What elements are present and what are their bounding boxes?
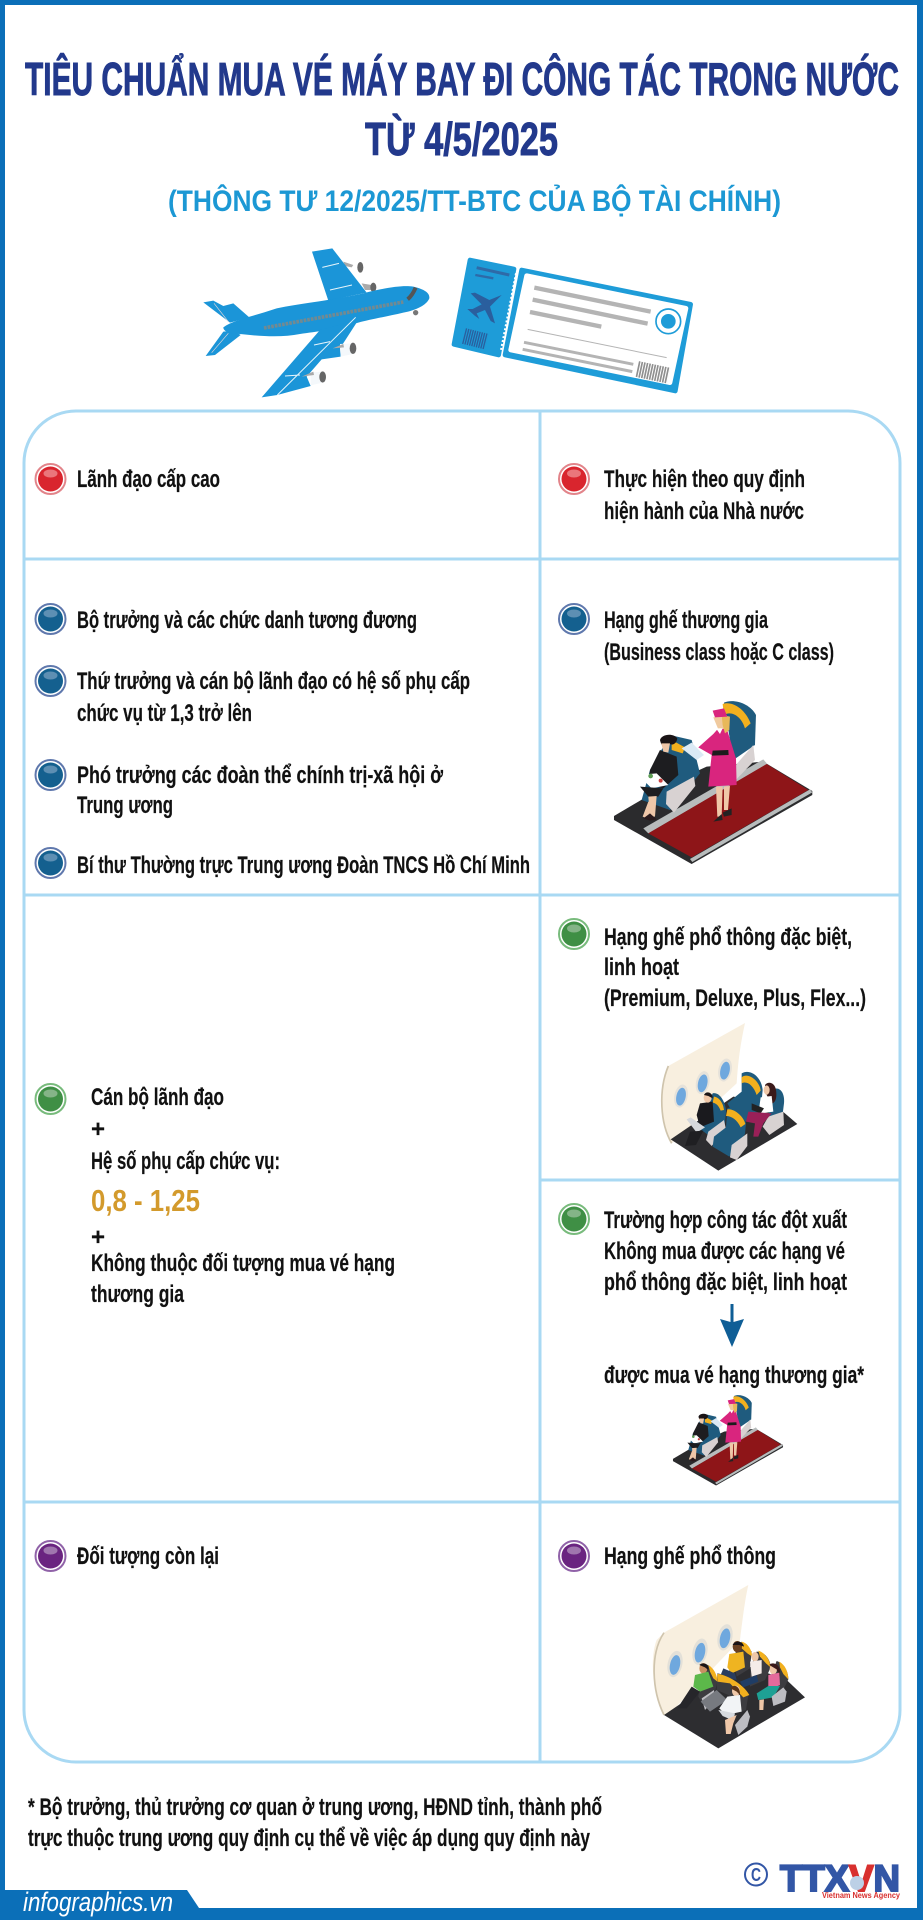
bullet: minister xyxy=(36,604,66,634)
text: youth union secretary: Bí thư Thường trực Trung ương Đoàn TNCS Hồ Chí Minh xyxy=(77,852,530,879)
bullet: red left xyxy=(36,464,66,494)
footnote xyxy=(28,1794,602,1852)
panel: comparison table xyxy=(24,411,900,1762)
bullet: business class xyxy=(559,604,589,634)
text: current state regulations: Thực hiện theo quy định xyxy=(604,466,805,493)
text: urgent travel xyxy=(604,1207,847,1296)
footnote: trực thuộc trung ương quy định cụ thể về việc áp dụng quy định này xyxy=(28,1825,590,1852)
arrow: down xyxy=(720,1304,744,1347)
title xyxy=(25,53,899,165)
row 4: remaining staff xyxy=(36,1541,805,1748)
text: business class xyxy=(604,607,834,666)
subtitle: (THÔNG TƯ 12/2025/TT-BTC CỦA BỘ TÀI CHÍNH) xyxy=(168,184,781,218)
footnote: * Bộ trưởng, thủ trưởng cơ quan ở trung ương, HĐND tỉnh, thành phố xyxy=(28,1794,602,1821)
text: premium economy xyxy=(604,924,866,1012)
text: current state regulations xyxy=(604,466,805,525)
bullet: red right xyxy=(559,464,589,494)
text: mid-level criteria: + xyxy=(91,1224,105,1251)
row 1: senior leaders xyxy=(36,464,805,525)
bullet: deputy minister xyxy=(36,666,66,696)
icon: airplane xyxy=(203,248,429,397)
text: mid-level criteria: Không thuộc đối tượng mua vé hạng xyxy=(91,1250,395,1277)
bullet: deputy heads xyxy=(36,760,66,790)
text: deputy heads: Phó trưởng các đoàn thể chính trị-xã hội ở xyxy=(77,762,444,789)
bullet: purple right xyxy=(559,1541,589,1571)
text: mid-level criteria xyxy=(91,1084,395,1308)
text: mid-level criteria: 0,8 - 1,25 xyxy=(91,1183,200,1218)
text: current state regulations: hiện hành của Nhà nước xyxy=(604,498,804,525)
illustration: small business cabin xyxy=(673,1395,783,1486)
bullet: green right top xyxy=(559,919,589,949)
text: deputy minister: Thứ trưởng và cán bộ lãnh đạo có hệ số phụ cấp xyxy=(77,668,470,695)
text: deputy minister: chức vụ từ 1,3 trở lên xyxy=(77,700,252,727)
bullet: youth union secretary xyxy=(36,848,66,878)
text: senior leaders: Lãnh đạo cấp cao xyxy=(77,466,220,493)
logo: TTXVN: C xyxy=(751,1865,761,1885)
text: mid-level criteria: thương gia xyxy=(91,1281,184,1308)
text: business class: Hạng ghế thương gia xyxy=(604,607,768,634)
text: economy: Hạng ghế phổ thông xyxy=(604,1543,776,1570)
logo: TTXVN: TTXVN xyxy=(780,1858,900,1899)
text: urgent travel: phổ thông đặc biệt, linh hoạt xyxy=(604,1269,847,1296)
bullet: green left xyxy=(36,1084,66,1114)
illustration: premium cabin xyxy=(662,1023,797,1171)
website tab xyxy=(0,1887,923,1920)
text: mid-level criteria: Cán bộ lãnh đạo xyxy=(91,1084,224,1111)
text: deputy minister xyxy=(77,668,470,727)
text: mid-level criteria: Hệ số phụ cấp chức vụ: xyxy=(91,1148,280,1175)
text: premium economy: linh hoạt xyxy=(604,954,679,981)
illustration: economy cabin xyxy=(653,1585,805,1748)
text: deputy heads xyxy=(77,762,444,819)
logo: TTXVN: Vietnam News Agency xyxy=(822,1890,900,1900)
bullet: green right bottom xyxy=(559,1204,589,1234)
bullet: purple left xyxy=(36,1541,66,1571)
icon: boarding pass xyxy=(454,260,691,391)
website tab: infographics.vn xyxy=(23,1887,173,1917)
text: mid-level criteria: + xyxy=(91,1116,105,1143)
row 2: ministers and equivalents xyxy=(36,604,834,879)
text: deputy heads: Trung ương xyxy=(77,792,173,819)
title: TỪ 4/5/2025 xyxy=(365,113,558,165)
text: others: Đối tượng còn lại xyxy=(77,1543,219,1570)
illustration: business class cabin xyxy=(614,701,812,864)
row 3: mid-level leaders xyxy=(36,919,866,1486)
text: minister: Bộ trưởng và các chức danh tương đương xyxy=(77,607,417,634)
